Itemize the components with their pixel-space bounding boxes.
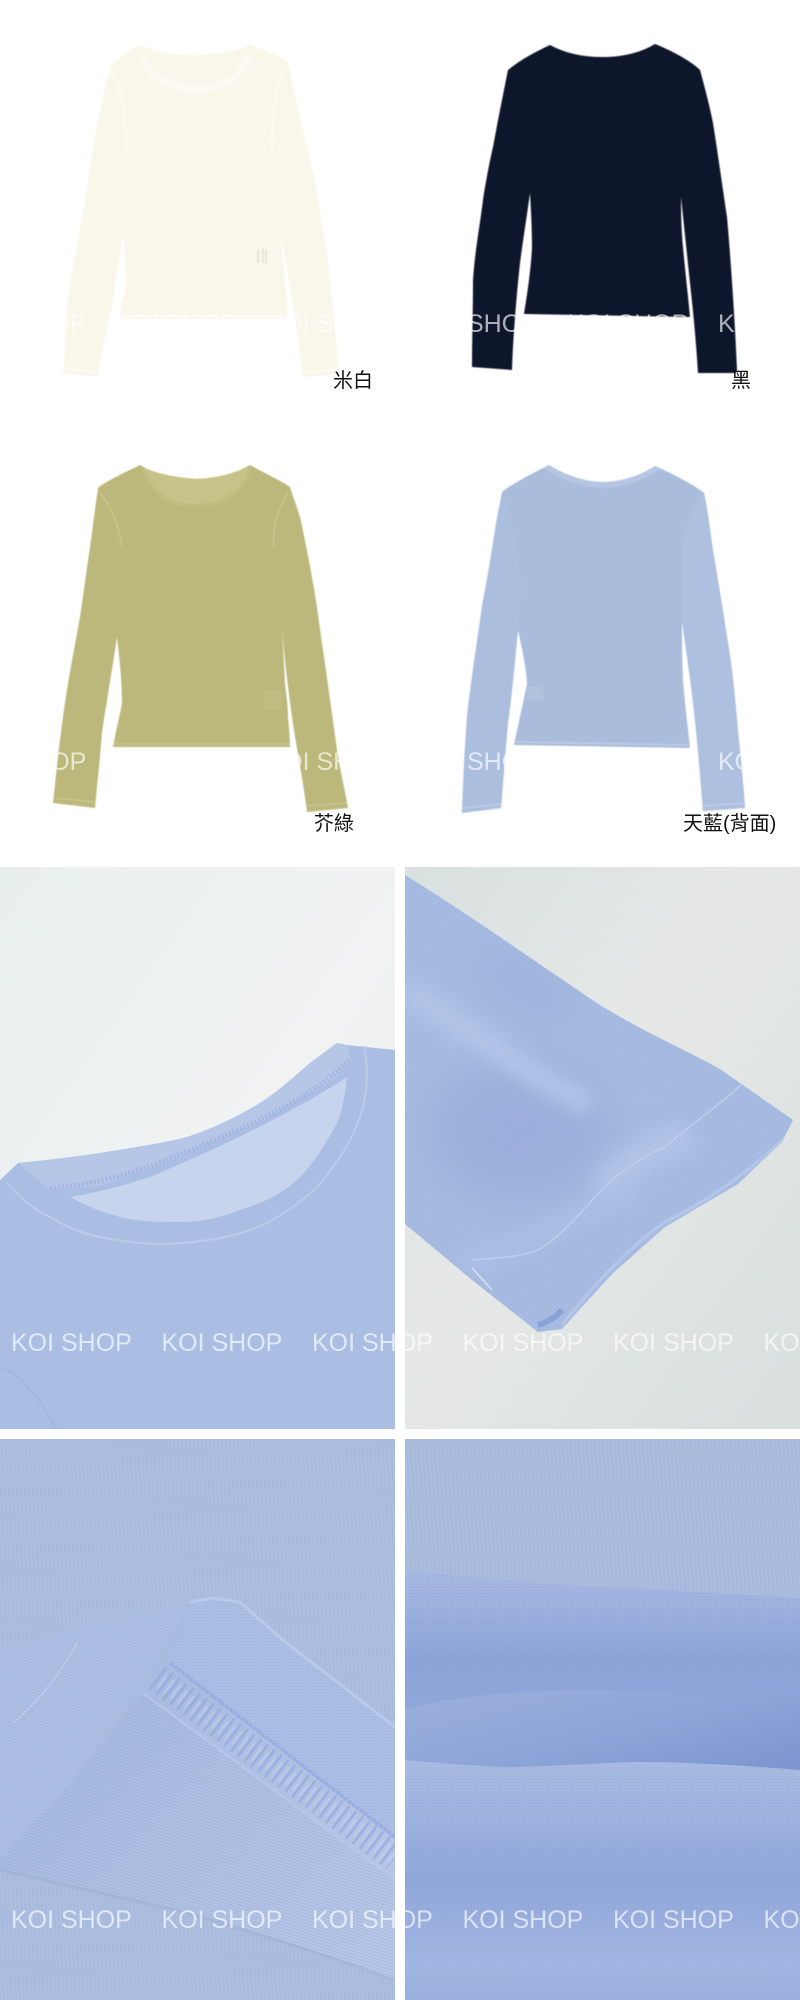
label: 天藍(背面): 天藍(背面) (683, 812, 776, 835)
watermarks: fourth row: KOI SHOP (312, 1906, 433, 1934)
label: 芥綠: 芥綠 (314, 812, 354, 835)
watermarks: third row (11, 1329, 800, 1357)
panel: cream top (63, 44, 373, 392)
watermarks: second row: KOI SHOP (116, 748, 237, 776)
panel: black top (472, 44, 751, 392)
folded fabric with overlock seam (0, 1598, 395, 1980)
label: 黑: 黑 (731, 370, 751, 392)
watermarks: fourth row: KOI SHOP (162, 1906, 282, 1934)
panel: sleeve cuff close-up (405, 867, 800, 1429)
panel: seam close-up (0, 1439, 395, 2000)
sky blue tee garment (462, 465, 745, 813)
watermarks: second row: KOI SHOP (266, 748, 387, 776)
panel: mustard green top (53, 465, 354, 835)
black tee garment (472, 44, 737, 373)
mustard green tee garment (53, 465, 348, 812)
label: 米白: 米白 (333, 369, 373, 392)
cream tee garment (63, 44, 338, 377)
watermarks: upper row: KOI SHOP (568, 310, 688, 338)
watermarks: second row: KOI SHOP (568, 748, 688, 776)
watermarks: upper row: KOI SHOP (116, 310, 237, 338)
watermarks: second row (0, 748, 800, 776)
panel: sky blue top back view (462, 465, 776, 835)
watermarks: fourth row: KOI SHOP (462, 1906, 583, 1934)
sleeve shape (405, 867, 800, 1347)
watermarks: upper row (0, 310, 800, 338)
watermarks: third row: KOI SHOP (312, 1329, 433, 1357)
watermarks: second row: KOI SHOP (417, 748, 538, 776)
watermarks: upper row: KOI SHOP (417, 310, 538, 338)
watermarks: fourth row: KOI SHOP (613, 1906, 734, 1934)
watermarks: third row: KOI SHOP (162, 1329, 282, 1357)
watermarks: third row: KOI SHOP (11, 1329, 132, 1357)
panel: collar close-up (0, 867, 395, 1429)
watermarks: fourth row: KOI SHOP (11, 1906, 132, 1934)
fabric folds (405, 1570, 800, 2000)
watermarks: third row: KOI SHOP (462, 1329, 583, 1357)
panel: fabric texture close-up (405, 1439, 800, 2000)
watermarks: third row: KOI SHOP (613, 1329, 734, 1357)
watermarks: upper row: KOI SHOP (266, 310, 387, 338)
watermarks: fourth row (11, 1906, 800, 1934)
collar sweater shape (0, 1043, 395, 1429)
